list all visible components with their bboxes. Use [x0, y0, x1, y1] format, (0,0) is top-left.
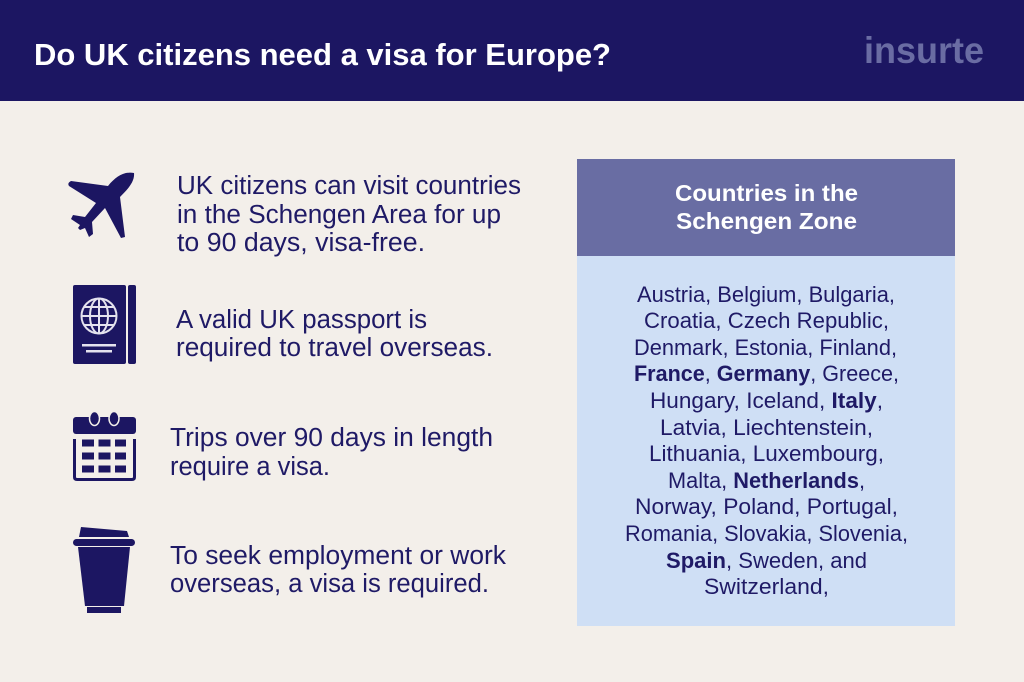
- country list: Romania, Slovakia, Slovenia,: [625, 521, 908, 546]
- country list: Malta, Netherlands,: [668, 468, 865, 493]
- country list: Norway, Poland, Portugal,: [635, 494, 898, 519]
- icon: coffee cup: [73, 527, 135, 613]
- text: schengen visit: [177, 172, 521, 257]
- icon: passport: [73, 285, 136, 364]
- country list: Croatia, Czech Republic,: [644, 308, 889, 333]
- panel: schengen countries: [577, 159, 955, 626]
- text: trips: [170, 424, 493, 481]
- header banner: [0, 0, 1024, 101]
- panel header: Countries in the: [675, 180, 858, 206]
- country list: Spain, Sweden, and: [666, 548, 867, 573]
- country list: Hungary, Iceland, Italy,: [650, 388, 883, 413]
- title: Do UK citizens need a visa for Europe?: [34, 37, 611, 72]
- text: trips: require a visa.: [170, 453, 330, 481]
- icon: airplane: [68, 173, 134, 238]
- panel header: [577, 159, 955, 256]
- text: passport: A valid UK passport is: [176, 306, 427, 334]
- text: schengen visit: UK citizens can visit countries: [177, 172, 521, 200]
- country list: Switzerland,: [704, 574, 829, 599]
- text: passport: required to travel overseas.: [176, 334, 493, 362]
- country list: Austria, Belgium, Bulgaria,: [637, 282, 895, 307]
- country list: France, Germany, Greece,: [634, 361, 899, 386]
- text: employment: To seek employment or work: [170, 542, 506, 570]
- text: schengen visit: to 90 days, visa-free.: [177, 229, 425, 257]
- icon: calendar: [73, 412, 136, 480]
- text: trips: Trips over 90 days in length: [170, 424, 493, 452]
- panel body: [577, 256, 955, 626]
- panel header: Schengen Zone: [676, 208, 857, 234]
- country list: Lithuania, Luxembourg,: [649, 441, 884, 466]
- text: passport: [176, 306, 493, 362]
- country list: Latvia, Liechtenstein,: [660, 415, 873, 440]
- logo: insurte: insurte: [864, 30, 984, 71]
- country list: Denmark, Estonia, Finland,: [634, 335, 897, 360]
- text: schengen visit: in the Schengen Area for up: [177, 201, 501, 229]
- country list: [625, 282, 908, 599]
- text: employment: [170, 542, 506, 598]
- text: employment: overseas, a visa is required.: [170, 570, 489, 598]
